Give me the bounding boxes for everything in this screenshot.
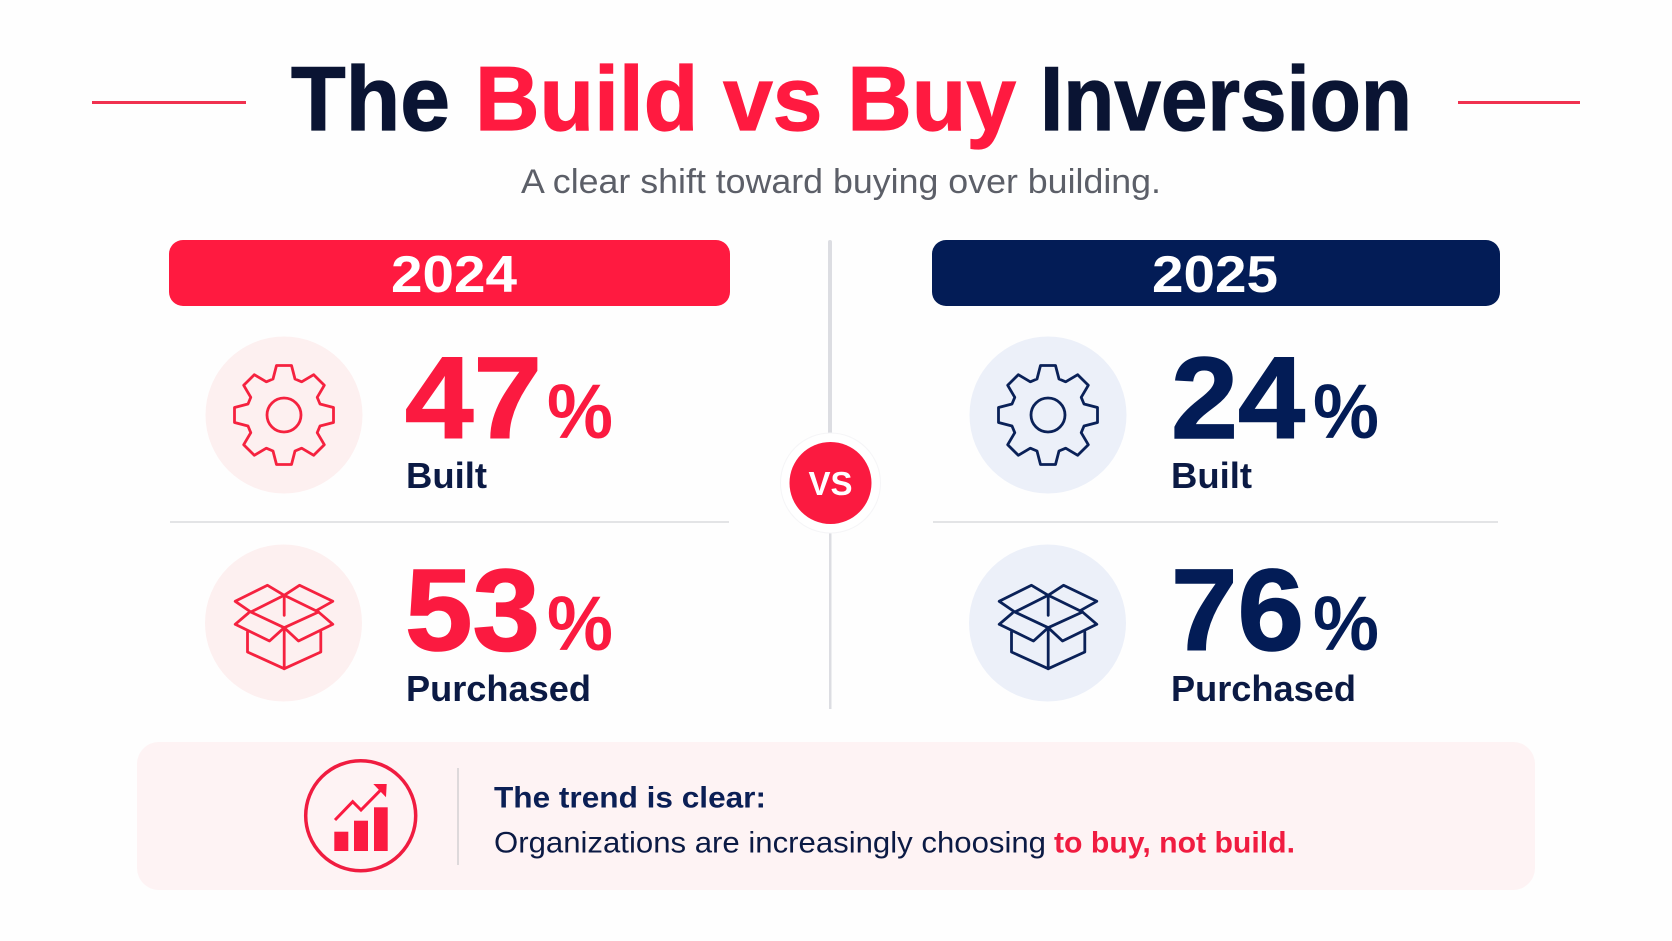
callout text: The trend is clear:	[494, 782, 766, 814]
stat: 53% purchased: %	[547, 581, 613, 667]
icon: box 2024	[205, 544, 362, 702]
callout text	[494, 782, 1295, 860]
title rule left	[92, 101, 246, 104]
stat: 47% built: %	[547, 369, 613, 455]
icon: box 2025	[969, 544, 1126, 702]
subtitle: A clear shift toward buying over building.	[521, 163, 1161, 201]
title rule right	[1458, 101, 1580, 104]
year banner 2024	[169, 240, 730, 306]
title	[291, 49, 1412, 150]
title: Build vs Buy	[475, 49, 1016, 150]
stat: 24% built	[1171, 333, 1379, 496]
stat: 24% built: Built	[1171, 455, 1252, 496]
icon: rising chart	[306, 761, 416, 871]
callout: trend	[137, 742, 1535, 890]
center divider with VS badge: VS	[808, 465, 852, 502]
title: Inversion	[1040, 49, 1412, 150]
stat: 47% built: Built	[406, 455, 487, 496]
title: The	[291, 49, 450, 150]
stat: 47% built: 47	[405, 333, 542, 463]
stat: 76% purchased: %	[1313, 581, 1379, 667]
stat: 76% purchased	[1171, 545, 1379, 709]
year banner 2024: 2024	[391, 246, 517, 304]
stat: 53% purchased	[405, 545, 613, 709]
stat: 76% purchased: 76	[1171, 545, 1304, 675]
year banner 2025: 2025	[1152, 246, 1278, 304]
stat: 24% built: %	[1313, 369, 1379, 455]
callout text: Organizations are increasingly choosing	[494, 826, 1046, 860]
stat: 47% built	[405, 333, 613, 496]
stat: 76% purchased: Purchased	[1171, 668, 1356, 709]
icon: gear 2025	[970, 336, 1126, 494]
header	[92, 49, 1580, 201]
icon: gear 2024	[206, 336, 362, 494]
stat: 53% purchased: 53	[405, 545, 540, 675]
callout text: to buy, not build.	[1054, 826, 1295, 860]
stat: 24% built: 24	[1171, 333, 1305, 463]
panel: 2025	[932, 240, 1500, 709]
year banner 2025	[932, 240, 1500, 306]
stat: 53% purchased: Purchased	[406, 668, 591, 709]
panel: 2024	[169, 240, 730, 709]
center divider with VS badge	[780, 240, 880, 709]
